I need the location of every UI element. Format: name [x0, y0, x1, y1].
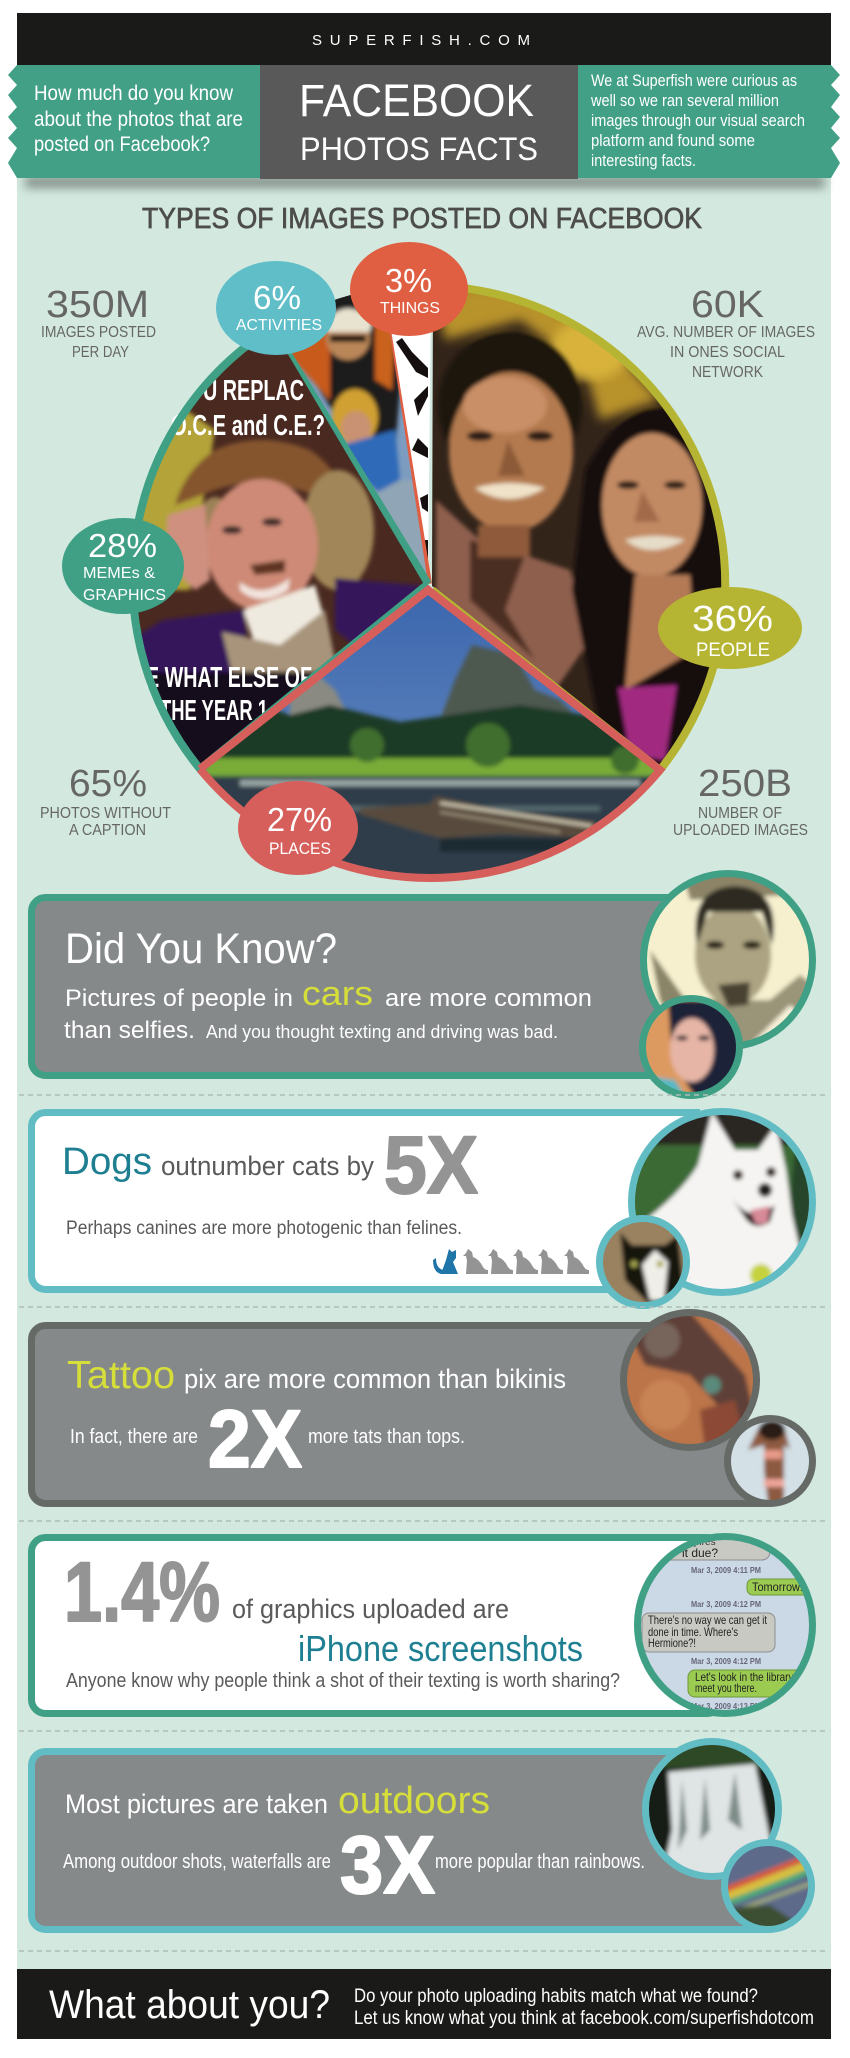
photo: text message screenshot: [630, 1530, 820, 1720]
stat: social network: IN ONES SOCIAL: [670, 344, 785, 361]
heading: [67, 1354, 566, 1397]
body text: In fact, there are: [70, 1426, 198, 1448]
site name: SUPERFISH.COM: [312, 32, 530, 49]
intro question: about the photos that are: [34, 108, 243, 131]
slice: activities photo: [292, 295, 426, 574]
slice: things photo: [392, 332, 430, 561]
slice: activities border: [272, 328, 428, 584]
heading: Dogs: [62, 1141, 152, 1183]
header ribbon: [8, 65, 840, 188]
icon row: cat and dogs: [433, 1249, 589, 1274]
intro answer: We at Superfish were curious as: [591, 71, 797, 90]
stat: images per day: [41, 284, 156, 361]
footer text: Do your photo uploading habits match what we found?: [354, 1986, 758, 2007]
stat: images per day: PER DAY: [72, 344, 129, 361]
photo: text message screenshot: Mar 3, 2009 4:11 PM: [691, 1565, 761, 1575]
photo: text message screenshot: done in time. Where's: [648, 1625, 738, 1639]
photo: bikini: [724, 1415, 816, 1507]
heading: [232, 1594, 583, 1669]
slice: things border: [387, 330, 428, 584]
meme caption text: [146, 375, 325, 727]
heading: iPhone screenshots: [298, 1628, 583, 1669]
meme caption text: THE YEAR 1: [160, 695, 268, 727]
panel: outdoors: [32, 1735, 818, 1935]
body text: Among outdoor shots, waterfalls are: [63, 1851, 331, 1873]
bubble: people 36%: [658, 587, 802, 669]
body text: [64, 975, 592, 1044]
photo: text message screenshot: ampires: [680, 1537, 716, 1548]
heading: outnumber cats by: [161, 1151, 374, 1181]
photo: text message screenshot: Tomorrow!!: [752, 1580, 806, 1594]
photo: text message screenshot: Let's look in the library. I: [695, 1670, 801, 1684]
stat: no caption: [40, 763, 171, 839]
photo: text message screenshot: it due?: [682, 1546, 718, 1560]
photo: text message screenshot: Hermione?!: [648, 1636, 696, 1650]
body text: more popular than rainbows.: [435, 1851, 645, 1873]
bubble: people 36%: PEOPLE: [696, 640, 770, 661]
photo: waterfall: [642, 1738, 782, 1880]
bubble: memes 28%: MEMEs &: [83, 565, 155, 582]
ribbon right panel: [578, 65, 840, 178]
body text: more tats than tops.: [308, 1426, 465, 1448]
top banner: [17, 13, 831, 65]
panel: did you know: [32, 865, 825, 1105]
slice: people photo: [432, 292, 722, 764]
slice: people border: [432, 286, 725, 770]
bubble: memes 28%: [62, 518, 184, 614]
bubble: things 3%: [350, 242, 468, 336]
bubble: people 36%: 36%: [692, 598, 773, 639]
bubble: places 27%: PLACES: [269, 839, 331, 858]
heading: [62, 1120, 478, 1211]
photo: cat: [595, 1212, 693, 1310]
stat: uploaded images: [673, 763, 808, 839]
divider 1: [19, 1094, 828, 1096]
heading: Most pictures are taken: [65, 1789, 328, 1819]
footer heading: What about you?: [49, 1983, 330, 2027]
body text: 2X: [208, 1394, 302, 1485]
big stat: 1.4%: [64, 1545, 220, 1639]
stat: images per day: IMAGES POSTED: [41, 324, 156, 341]
slice: memes photo: [138, 350, 423, 764]
footer bar: [17, 1969, 831, 2039]
icon: cat: [433, 1249, 458, 1274]
bubble: activities 6%: ACTIVITIES: [236, 317, 322, 334]
body text: Pictures of people in: [65, 985, 293, 1012]
intro answer: platform and found some: [591, 131, 755, 150]
bubble: things 3%: THINGS: [380, 300, 440, 317]
divider 3: [19, 1520, 828, 1522]
heading: Did You Know?: [65, 925, 337, 973]
stat: no caption: 65%: [69, 763, 147, 805]
intro question: [34, 82, 243, 156]
heading: of graphics uploaded are: [232, 1594, 509, 1624]
bubble: things 3%: 3%: [385, 262, 432, 299]
main title: PHOTOS FACTS: [300, 131, 538, 167]
bubble: memes 28%: 28%: [88, 527, 157, 564]
bubble: activities 6%: 6%: [253, 279, 301, 316]
photo: man in car: [640, 870, 816, 1049]
photo: rainbow: [721, 1839, 815, 1933]
slice: places border: [200, 590, 660, 878]
stat: social network: AVG. NUMBER OF IMAGES: [637, 324, 815, 341]
stat: images per day: 350M: [46, 284, 149, 326]
bubble: activities 6%: [216, 261, 336, 355]
ribbon left panel: [8, 65, 260, 178]
body text: And you thought texting and driving was bad.: [206, 1022, 558, 1042]
meme caption text: U REPLAC: [203, 375, 304, 407]
stat: uploaded images: NUMBER OF: [698, 805, 782, 822]
divider 5: [19, 1950, 828, 1952]
body text: cars: [302, 975, 373, 1013]
stat: social network: 60K: [691, 284, 764, 326]
bubble: places 27%: [238, 781, 358, 875]
divider 2: [19, 1306, 828, 1308]
bubble: places 27%: 27%: [267, 801, 332, 838]
stat: no caption: A CAPTION: [69, 822, 146, 839]
heading: pix are more common than bikinis: [184, 1364, 566, 1394]
footer text: [354, 1986, 814, 2029]
body text: 3X: [340, 1820, 435, 1911]
photo: text message screenshot: meet you there.: [695, 1681, 757, 1695]
photo: text message screenshot: Mar 3, 2009 4:13 PM: [691, 1701, 761, 1711]
intro question: posted on Facebook?: [34, 133, 210, 156]
heading: Tattoo: [67, 1354, 175, 1397]
divider 4: [19, 1730, 828, 1732]
heading: 5X: [384, 1120, 478, 1211]
bubble: memes 28%: GRAPHICS: [83, 587, 166, 604]
photo: white dog: [625, 1105, 820, 1300]
photo: text message screenshot: Mar 3, 2009 4:12 PM: [691, 1599, 761, 1609]
photo: text message screenshot: Mar 3, 2009 4:12 PM: [691, 1656, 761, 1666]
stat: no caption: PHOTOS WITHOUT: [40, 805, 171, 822]
photo: text message screenshot: There's no way we can get it: [648, 1613, 768, 1627]
main title: [299, 75, 538, 167]
slice: places photo: [206, 595, 654, 874]
heading: outdoors: [338, 1780, 490, 1822]
panel: dogs vs cats: [32, 1105, 820, 1310]
intro answer: images through our visual search: [591, 111, 805, 130]
body text: Perhaps canines are more photogenic than felines.: [66, 1218, 462, 1239]
main title: FACEBOOK: [299, 75, 534, 126]
pie chart: [120, 280, 745, 890]
stat: uploaded images: UPLOADED IMAGES: [673, 822, 808, 839]
stat: social network: [637, 284, 815, 381]
slice: memes border: [133, 328, 428, 769]
body text: than selfies.: [64, 1017, 195, 1044]
panel: tattoo vs bikini: [32, 1305, 820, 1512]
heading: [65, 1780, 490, 1822]
body text: [70, 1394, 465, 1485]
body text: Anyone know why people think a shot of their texting is worth sharing?: [66, 1670, 620, 1692]
ribbon centre panel: [260, 65, 578, 179]
stat: social network: NETWORK: [692, 364, 764, 381]
intro answer: [590, 71, 805, 170]
intro question: How much do you know: [34, 82, 234, 105]
body text: [63, 1820, 645, 1911]
stat: uploaded images: 250B: [698, 763, 792, 805]
body text: are more common: [385, 985, 592, 1012]
intro answer: well so we ran several million: [590, 91, 779, 110]
panel: iphone screenshots: [32, 1530, 820, 1720]
meme caption text: O.C.E and C.E.?: [171, 410, 325, 442]
photo: tattooed torso: [620, 1309, 760, 1451]
intro answer: interesting facts.: [591, 151, 696, 170]
meme caption text: E WHAT ELSE OF: [146, 662, 312, 694]
section heading: TYPES OF IMAGES POSTED ON FACEBOOK: [142, 203, 703, 235]
photo: selfie: [639, 995, 743, 1099]
